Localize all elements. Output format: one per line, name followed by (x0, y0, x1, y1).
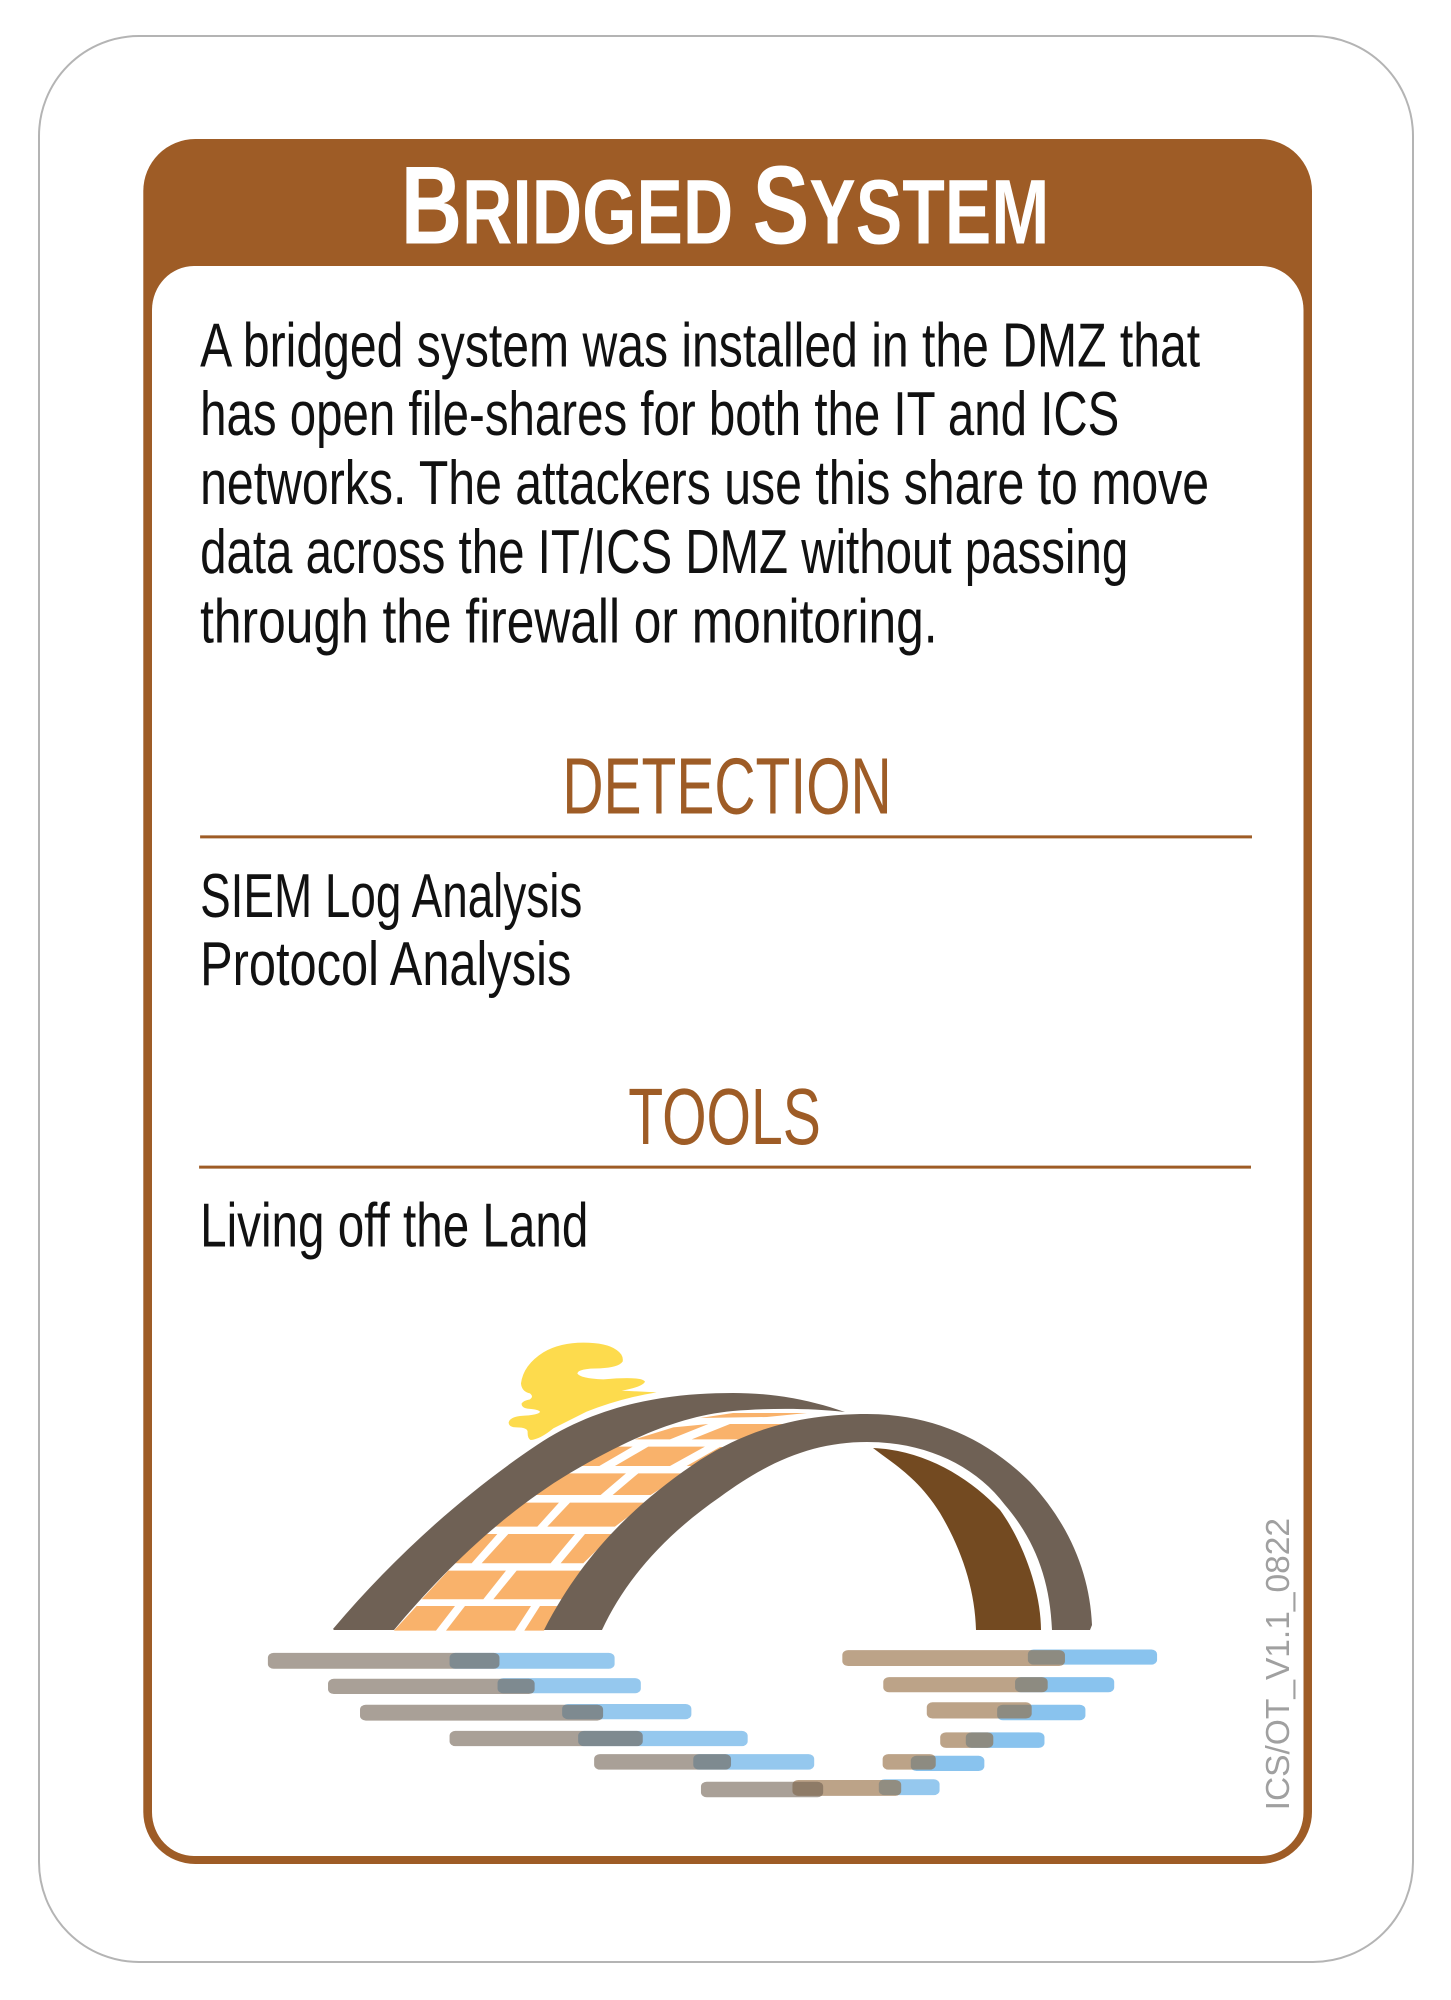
back arch (333, 1393, 845, 1630)
panel: white content area (152, 266, 1304, 1856)
inner arch shadow (873, 1448, 1041, 1630)
detection list: SIEM Log Analysis (200, 862, 582, 931)
bricks (394, 1413, 807, 1631)
left reflection bars (268, 1653, 814, 1770)
detection list (200, 862, 582, 999)
right reflection bars (842, 1649, 1157, 1771)
tools list: Living off the Land (200, 1192, 588, 1261)
illustration: bridge (333, 1343, 1092, 1631)
body text (200, 311, 1209, 657)
heading: detection: DETECTION (562, 741, 892, 830)
detection list: Protocol Analysis (200, 930, 571, 999)
body text: has open file-shares for both the IT and ICS (200, 380, 1119, 449)
card text (199, 143, 1296, 1810)
front arch (544, 1414, 1092, 1630)
body text: data across the IT/ICS DMZ without passing (200, 518, 1128, 587)
version label: ICS/OT_V1.1_0822 (1259, 1518, 1296, 1810)
bottom reflection bar (701, 1779, 940, 1797)
icon: sun (509, 1343, 657, 1440)
body text: A bridged system was installed in the DMZ that (200, 311, 1200, 380)
title: BRIDGED SYSTEM (401, 143, 1049, 268)
heading: tools: TOOLS (628, 1072, 821, 1161)
panel: brown framed card (143, 139, 1312, 1864)
body text: through the firewall or monitoring. (200, 588, 938, 657)
water reflection bars (268, 1649, 1157, 1797)
